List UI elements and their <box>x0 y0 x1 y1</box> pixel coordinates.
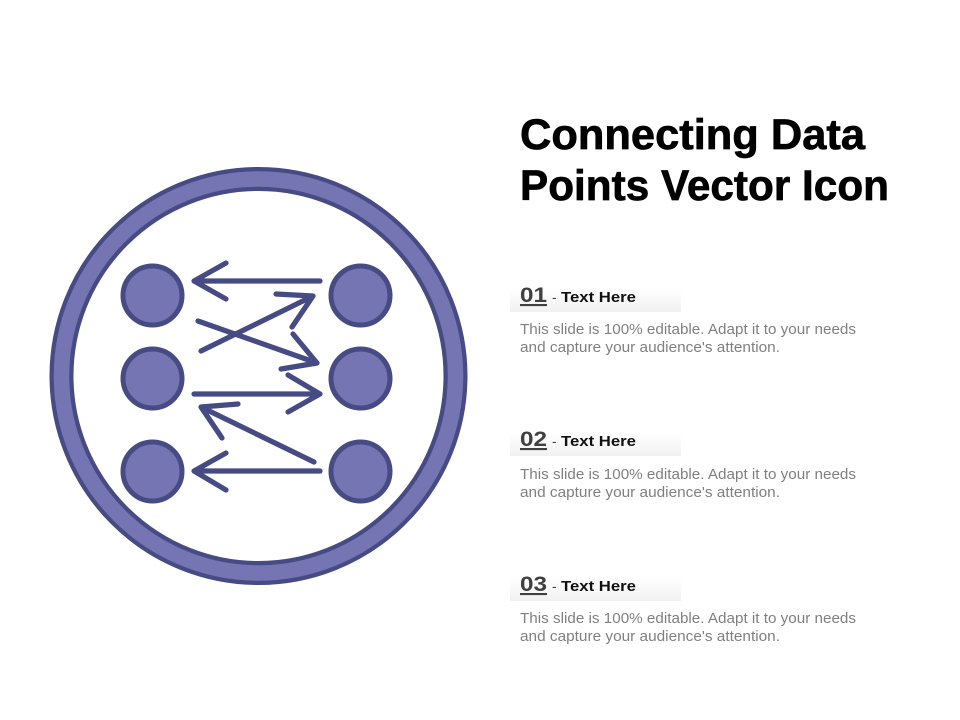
description: and capture your audience's attention. <box>520 629 780 645</box>
number: 01 <box>520 284 547 307</box>
icon: connecting data points <box>62 179 456 573</box>
description: This slide is 100% editable. Adapt it to your needs <box>520 322 856 338</box>
number: 02 <box>520 428 547 451</box>
description: and capture your audience's attention. <box>520 340 780 356</box>
data points <box>123 266 390 501</box>
item 02: Text Here <box>561 433 636 450</box>
description <box>520 322 856 356</box>
item 01 <box>510 284 856 356</box>
description: This slide is 100% editable. Adapt it to your needs <box>520 611 856 627</box>
description: This slide is 100% editable. Adapt it to your needs <box>520 467 856 483</box>
item 03 <box>510 573 856 645</box>
label: - <box>552 289 557 305</box>
ring fill <box>62 179 456 573</box>
description <box>520 467 856 501</box>
description <box>520 611 856 645</box>
arrows <box>194 263 320 490</box>
title: Connecting Data <box>520 111 866 159</box>
title <box>520 111 889 210</box>
title: Points Vector Icon <box>520 162 889 210</box>
description: and capture your audience's attention. <box>520 485 780 501</box>
label: - <box>552 578 557 594</box>
label: - <box>552 433 557 449</box>
item 03: Text Here <box>561 578 636 595</box>
label bar <box>510 289 681 312</box>
number: 03 <box>520 573 547 596</box>
item 02 <box>510 428 856 501</box>
outer ring <box>62 179 456 573</box>
label bar <box>510 433 681 456</box>
label bar <box>510 578 681 601</box>
item 01: Text Here <box>561 289 636 306</box>
